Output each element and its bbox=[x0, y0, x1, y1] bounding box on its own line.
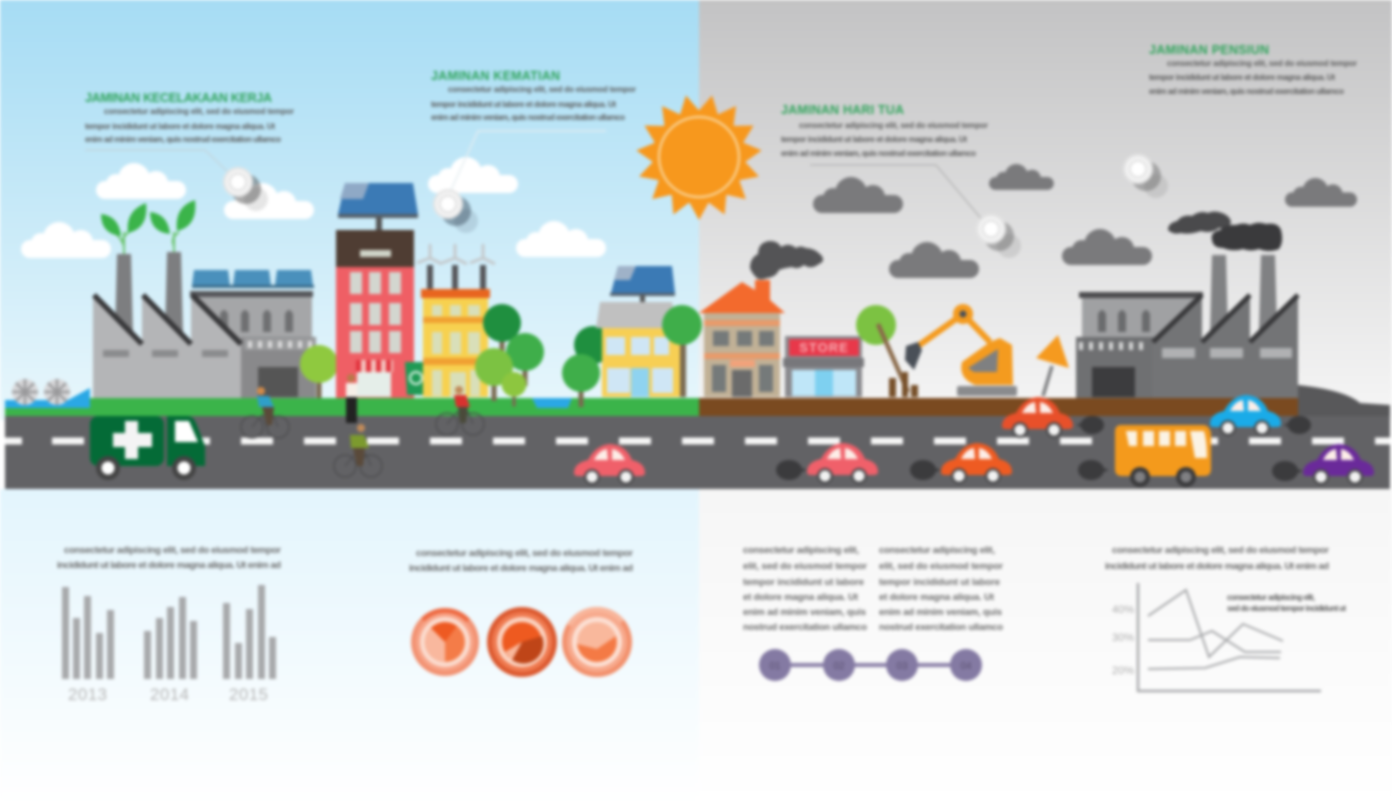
ambulance bbox=[90, 416, 205, 480]
heading block: Jaminan Pensiun: tempor incididunt ut labore et dolore magna aliqua. Ut bbox=[1149, 73, 1335, 82]
marker pin: Hari Tua bbox=[810, 165, 1021, 258]
pedestrian bbox=[346, 374, 357, 423]
text block: line chart intro: consectetur adipiscing elit, sed do eiusmod tempor bbox=[1112, 545, 1329, 556]
chimneys bbox=[115, 252, 183, 334]
chimneys right bbox=[1210, 255, 1277, 335]
text block: two columns: elit, sed do eiusmod tempor bbox=[743, 561, 867, 572]
icon: wind turbine wheels bbox=[12, 379, 70, 405]
ground strip: dirt bbox=[699, 398, 1317, 416]
trees left bbox=[475, 304, 612, 407]
icon: green sprouts bbox=[101, 200, 195, 254]
sawtooth hall right bbox=[1152, 295, 1298, 398]
text block: bar chart intro: incididunt ut labore et dolore magna aliqua. Ut enim ad bbox=[57, 560, 281, 571]
donut charts bbox=[411, 607, 632, 677]
fallen tree bbox=[856, 305, 918, 397]
bar chart year labels bbox=[68, 685, 268, 704]
icon: sun bbox=[635, 93, 763, 220]
text block: two columns: nostrud exercitation ullamco bbox=[743, 622, 867, 633]
text block: two columns: tempor incididunt ut labore bbox=[879, 577, 1000, 588]
exhaust smoke bbox=[776, 416, 1311, 481]
background: polluted sky bbox=[699, 0, 1392, 420]
cyclist: upper left bbox=[241, 387, 289, 438]
heading block: Jaminan Hari Tua: tempor incididunt ut labore et dolore magna aliqua. Ut bbox=[781, 135, 967, 144]
text block: two columns: consectetur adipiscing elit, bbox=[879, 545, 995, 556]
ground strip: dark hill bbox=[1298, 385, 1390, 416]
heading block: Jaminan Hari Tua: JAMINAN HARI TUA bbox=[781, 103, 904, 117]
text block: donut intro: consectetur adipiscing elit, sed do eiusmod tempor bbox=[416, 548, 633, 559]
sawtooth roof strokes bbox=[94, 295, 241, 344]
text block: line chart intro bbox=[1105, 545, 1329, 572]
rooftop wind turbines bbox=[417, 244, 495, 289]
text block: bar chart intro bbox=[57, 545, 281, 571]
store: STORE bbox=[799, 340, 849, 355]
heading block: Jaminan Kematian: consectetur adipiscing elit, sed do eiusmod tempor bbox=[448, 85, 636, 94]
clean sky clouds bbox=[21, 157, 606, 258]
car: pink bbox=[574, 444, 645, 485]
axis labels: 30% bbox=[1112, 632, 1134, 644]
heading block: Jaminan Kecelakaan Kerja: JAMINAN KECELAKAAN KERJA bbox=[85, 91, 272, 105]
donut 2 bbox=[487, 607, 557, 677]
car: orange upper bbox=[1002, 397, 1073, 438]
polluted sky clouds bbox=[813, 164, 1357, 278]
excavator bbox=[905, 304, 1017, 396]
chart note bbox=[1227, 593, 1346, 613]
axis labels: 40% bbox=[1112, 604, 1134, 616]
sawtooth hall bbox=[93, 295, 241, 398]
yellow house with solar bbox=[596, 266, 680, 397]
factory windows bbox=[103, 350, 228, 357]
cyclist: upper right bbox=[436, 386, 484, 435]
background: clean sky bbox=[0, 0, 699, 420]
chart note: sed do eiusmod tempor incididunt ut bbox=[1227, 604, 1346, 613]
car: purple bbox=[1303, 444, 1374, 485]
text block: two columns: tempor incididunt ut labore bbox=[743, 577, 864, 588]
heading block: Jaminan Kecelakaan Kerja bbox=[85, 91, 294, 144]
chimney smoke house bbox=[750, 241, 823, 279]
road dashes bbox=[5, 438, 1390, 444]
school bus bbox=[1115, 425, 1211, 487]
text block: donut intro bbox=[409, 548, 633, 574]
heading block: Jaminan Kematian: enim ad minim veniam, quis nostrud exercitation ullamco bbox=[431, 113, 625, 122]
warning sign bbox=[1036, 335, 1069, 396]
text block: two columns: et dolore magna aliqua. Ut bbox=[879, 592, 995, 603]
background: lower left panel bbox=[0, 489, 699, 802]
heading block: Jaminan Hari Tua: consectetur adipiscing elit, sed do eiusmod tempor bbox=[799, 121, 988, 130]
text block: bar chart intro: consectetur adipiscing elit, sed do eiusmod tempor bbox=[64, 545, 281, 556]
donut 3 bbox=[562, 607, 632, 677]
cyclist: lower bbox=[334, 424, 382, 477]
car: red bbox=[807, 443, 878, 484]
heading block: Jaminan Pensiun bbox=[1149, 43, 1357, 96]
heading block: Jaminan Kematian: tempor incididunt ut labore et dolore magna aliqua. Ut bbox=[431, 100, 616, 109]
text block: two columns: enim ad minim veniam, quis bbox=[879, 607, 1002, 618]
donut 1 bbox=[411, 608, 479, 676]
roof solar panel bbox=[338, 183, 418, 230]
car: blue bbox=[1210, 395, 1281, 436]
marker pin: Kematian bbox=[433, 131, 606, 233]
heading block: Jaminan Kematian: JAMINAN KEMATIAN bbox=[431, 69, 560, 83]
bar chart: 2013 to 2015 bbox=[62, 585, 276, 704]
heading block: Jaminan Kematian bbox=[431, 69, 636, 122]
palm tree bbox=[662, 305, 702, 397]
axis labels: 20% bbox=[1112, 665, 1134, 677]
chart note: consectetur adipiscing elit, bbox=[1227, 593, 1315, 602]
marker pin: Kecelakaan Kerja bbox=[85, 150, 268, 211]
text block: donut intro: incididunt ut labore et dolore magna aliqua. Ut enim ad bbox=[409, 563, 633, 574]
timeline: steps 01 to 04: 04 bbox=[960, 661, 972, 672]
heading block: Jaminan Kecelakaan Kerja: tempor incididunt ut labore et dolore magna aliqua. Ut bbox=[85, 122, 275, 131]
timeline: steps 01 to 04: 01 bbox=[769, 661, 781, 672]
text block: two columns: elit, sed do eiusmod tempor bbox=[879, 561, 1003, 572]
heading block: Jaminan Hari Tua bbox=[781, 103, 988, 158]
house polluted bbox=[699, 280, 785, 397]
heading block: Jaminan Pensiun: consectetur adipiscing elit, sed do eiusmod tempor bbox=[1167, 59, 1357, 68]
marker pin: Pensiun bbox=[1123, 154, 1168, 198]
rear grey building right bbox=[1076, 292, 1203, 398]
solar panel bbox=[610, 266, 675, 302]
rear grey building bbox=[190, 291, 316, 398]
icon: recycling bin bbox=[405, 362, 427, 395]
right factory bbox=[1076, 255, 1298, 398]
text block: two columns: enim ad minim veniam, quis bbox=[743, 607, 866, 618]
tree: light green by factory bbox=[300, 345, 338, 398]
heading block: Jaminan Kecelakaan Kerja: consectetur adipiscing elit, sed do eiusmod tempor bbox=[104, 107, 294, 116]
line chart bbox=[1112, 583, 1346, 691]
car: orange bbox=[941, 443, 1012, 484]
text block: line chart intro: incididunt ut labore et dolore magna aliqua. Ut enim ad bbox=[1105, 561, 1329, 572]
heading block: Jaminan Kecelakaan Kerja: enim ad minim veniam, quis nostrud exercitation ullamco bbox=[85, 135, 281, 144]
solar panels on factory bbox=[192, 270, 314, 288]
factory smoke bbox=[1168, 212, 1282, 251]
left factory bbox=[93, 252, 316, 398]
text block: two columns: et dolore magna aliqua. Ut bbox=[743, 592, 859, 603]
store bbox=[783, 336, 864, 397]
axis labels bbox=[1112, 604, 1134, 677]
timeline: steps 01 to 04: 03 bbox=[896, 661, 908, 672]
heading block: Jaminan Pensiun: JAMINAN PENSIUN bbox=[1149, 43, 1269, 57]
heading block: Jaminan Pensiun: enim ad minim veniam, quis nostrud exercitation ullamco bbox=[1149, 87, 1344, 96]
timeline: steps 01 to 04: 02 bbox=[833, 661, 845, 672]
bar chart year labels: 2015 bbox=[229, 685, 268, 704]
text block: two columns: consectetur adipiscing elit, bbox=[743, 545, 859, 556]
windows right bbox=[1162, 348, 1292, 358]
ground strip: water bbox=[5, 388, 572, 408]
bar chart year labels: 2014 bbox=[150, 685, 189, 704]
text block: two columns: nostrud exercitation ullamco bbox=[879, 622, 1003, 633]
red apartment with solar roof bbox=[336, 183, 418, 398]
ground strip: grass bbox=[5, 398, 699, 416]
yellow building bbox=[421, 289, 490, 397]
text block: two columns bbox=[743, 545, 1003, 633]
sawtooth roof strokes right bbox=[1153, 295, 1298, 342]
heading block: Jaminan Hari Tua: enim ad minim veniam, quis nostrud exercitation ullamco bbox=[781, 149, 976, 158]
road bbox=[5, 416, 1390, 489]
background: lower right panel bbox=[699, 489, 1392, 802]
timeline: steps 01 to 04 bbox=[759, 649, 982, 681]
bar chart year labels: 2013 bbox=[68, 685, 107, 704]
